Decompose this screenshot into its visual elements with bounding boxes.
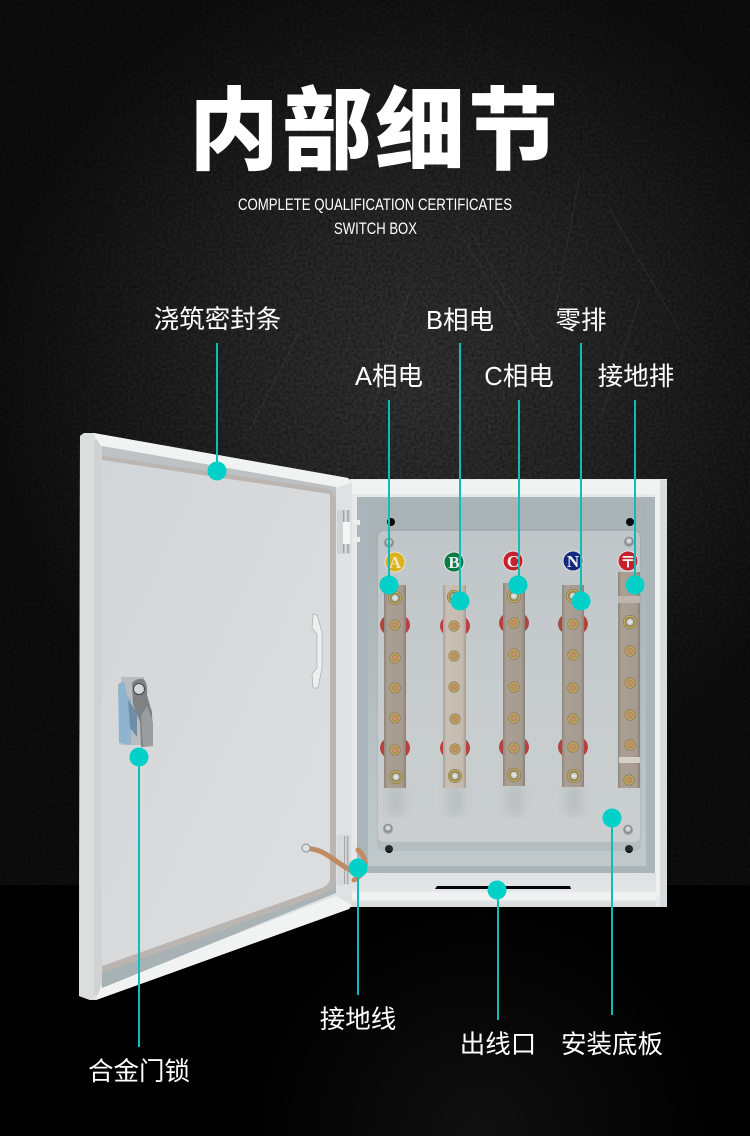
callout: 合金门锁: 合金门锁 [88, 1058, 190, 1086]
cabinet back panel [368, 503, 646, 867]
door outer frame [79, 433, 352, 1000]
background: black floor [0, 885, 750, 1136]
phase badges: N [567, 552, 580, 571]
phase badges: C [507, 552, 519, 571]
door frame highlight [93, 433, 352, 1000]
callout: C相电: C相电 [484, 363, 554, 391]
callout: A相电 [355, 363, 423, 594]
title: 内部细节 [189, 82, 561, 182]
door left edge inner strip [94, 440, 102, 995]
phase badges: A [389, 553, 402, 572]
door left edge [79, 433, 94, 1000]
callout: 出线口: 出线口 [460, 1031, 536, 1059]
plate screws [383, 537, 634, 835]
callout: 安装底板: 安装底板 [561, 1031, 663, 1059]
cabinet bottom lip [352, 866, 656, 907]
top hinge [337, 510, 360, 554]
red insulators [380, 611, 588, 760]
phase badges: 〒 [620, 555, 636, 571]
door inner panel [102, 460, 330, 966]
busbar N [562, 585, 584, 787]
callout: 浇筑密封条: 浇筑密封条 [154, 306, 281, 334]
busbar A [384, 585, 406, 788]
bottom hinge [337, 835, 350, 885]
mounting plate [377, 529, 641, 851]
door handle [312, 614, 322, 688]
cabinet outer rim [350, 479, 667, 907]
callout: 合金门锁 [88, 748, 190, 1086]
subtitle: SWITCH BOX [334, 220, 417, 238]
alloy door lock [118, 677, 153, 747]
callout: 出线口 [460, 880, 536, 1059]
cabinet interior walls [357, 497, 655, 874]
phase badges [385, 551, 638, 572]
phase badges: B [448, 553, 460, 572]
busbar B [443, 585, 466, 788]
cabinet body [350, 479, 667, 907]
busbar C [503, 583, 525, 786]
door [79, 433, 365, 1000]
callout: 接地线 [320, 858, 396, 1034]
subtitle [238, 196, 512, 238]
cabinet rim highlights [352, 480, 666, 494]
grounding bar [618, 572, 640, 788]
callout: 接地线: 接地线 [320, 1006, 396, 1034]
mounting holes [385, 518, 634, 853]
background: dark chalkboard wall [0, 0, 750, 885]
door sealing gasket [102, 456, 336, 973]
callout: B相电 [426, 307, 494, 610]
callout: 接地排 [598, 363, 674, 594]
callout: 零排 [555, 307, 607, 610]
callout: B相电: B相电 [426, 307, 494, 335]
callout: A相电: A相电 [355, 363, 423, 391]
callout: 零排: 零排 [555, 307, 607, 335]
callout: 安装底板 [561, 808, 663, 1059]
subtitle: COMPLETE QUALIFICATION CERTIFICATES [238, 196, 512, 214]
callout: 浇筑密封条 [154, 306, 281, 480]
callout: C相电 [484, 363, 554, 594]
cabinet right rim [655, 480, 667, 907]
grounding wire [302, 844, 365, 880]
callout: 接地排: 接地排 [598, 363, 674, 391]
door recess [102, 446, 336, 988]
